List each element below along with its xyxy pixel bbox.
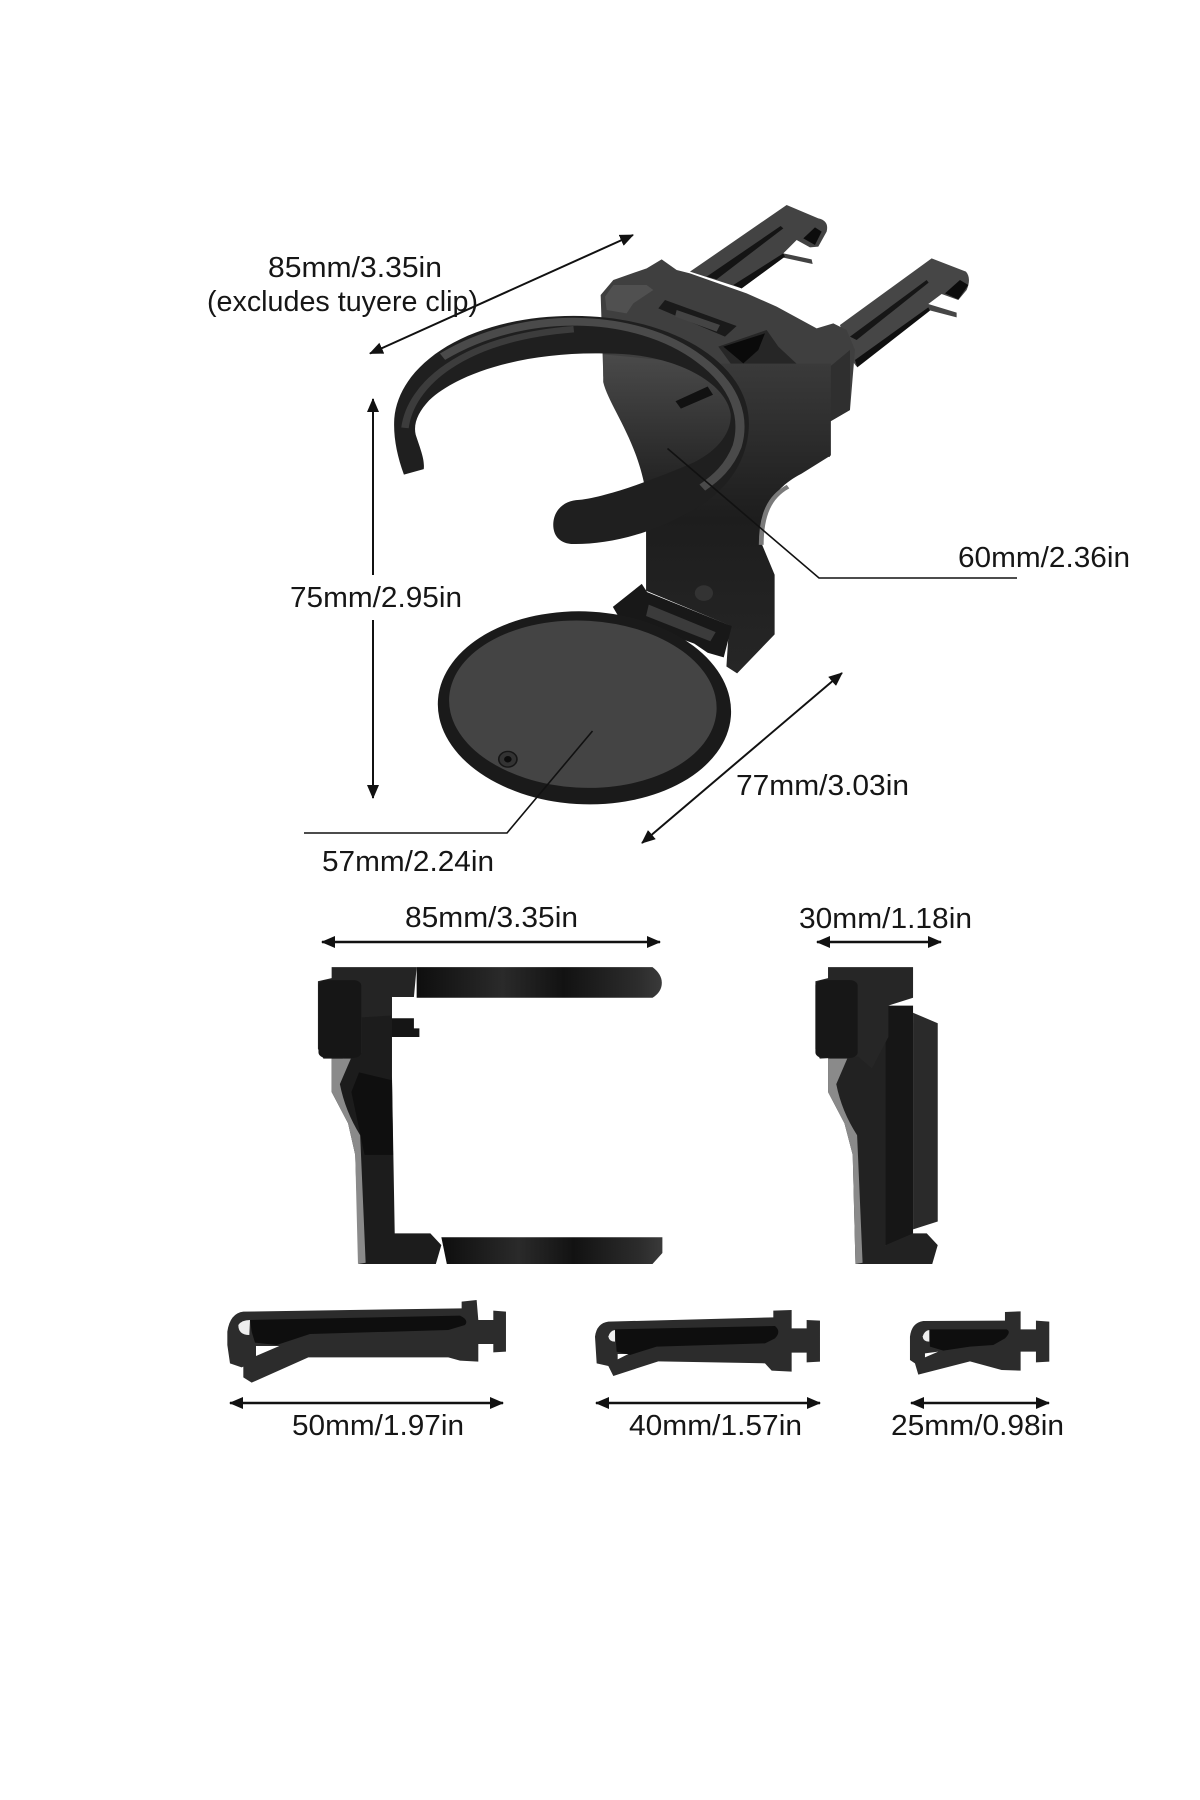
round tray bbox=[430, 603, 739, 813]
stem bbox=[828, 998, 938, 1264]
head block bbox=[318, 967, 417, 1059]
back plate bbox=[603, 354, 737, 488]
vent clip: long bbox=[227, 1300, 506, 1383]
dimension: side depth 30mm: 30mm/1.18in bbox=[799, 903, 972, 935]
top ring bar bbox=[417, 967, 662, 998]
stem highlight bbox=[828, 1059, 863, 1264]
dimension: tray inner 57mm bbox=[304, 731, 592, 878]
dimension: 25mm clip: 25mm/0.98in bbox=[891, 1410, 1064, 1442]
dimension: inner ring 60mm: 60mm/2.36in bbox=[958, 542, 1130, 574]
dimension: height 75mm: 75mm/2.95in bbox=[290, 582, 462, 614]
clip head bbox=[601, 259, 855, 457]
dimension: tray inner 57mm: 57mm/2.24in bbox=[322, 846, 494, 878]
tray plate bbox=[883, 1006, 913, 1245]
dimension: 40mm clip: 40mm/1.57in bbox=[629, 1410, 802, 1442]
right clip arm bbox=[840, 258, 969, 367]
tray hinge bbox=[613, 584, 732, 657]
stem bbox=[646, 364, 831, 673]
stem bbox=[332, 998, 441, 1264]
head side face bbox=[815, 980, 858, 1058]
dimension: ring depth 85mm: (excludes tuyere clip) bbox=[207, 286, 478, 318]
dimension: tray width 77mm bbox=[642, 673, 909, 843]
plate pins bbox=[676, 387, 713, 409]
vent clip arms and head bbox=[601, 205, 969, 457]
vent clip: medium bbox=[595, 1310, 820, 1376]
head block bbox=[815, 967, 913, 1068]
dimension: ring depth 85mm: 85mm/3.35in bbox=[268, 252, 442, 284]
dimension: tray width 77mm: 77mm/3.03in bbox=[736, 770, 909, 802]
product: side view closed bbox=[815, 967, 938, 1264]
pin bbox=[386, 1018, 419, 1037]
dimension: 50mm clip: 50mm/1.97in bbox=[292, 1410, 464, 1442]
dimension: ring depth 85mm bbox=[207, 235, 633, 354]
cup ring bbox=[394, 316, 749, 544]
stem screw bbox=[695, 585, 713, 601]
dimension: inner ring 60mm bbox=[668, 448, 1130, 578]
stem highlight bbox=[332, 1059, 366, 1264]
head side face bbox=[318, 980, 361, 1058]
stem shade bbox=[351, 1072, 393, 1155]
product: side view open bbox=[318, 967, 662, 1264]
stem highlight bbox=[761, 487, 788, 545]
product: perspective view of cup holder bbox=[394, 205, 969, 813]
dimension: side width 85mm: 85mm/3.35in bbox=[405, 902, 578, 934]
left clip arm bbox=[690, 205, 827, 288]
stem, ring and tray bbox=[394, 316, 831, 813]
tray edge bbox=[913, 1013, 938, 1229]
bottom ring bar bbox=[441, 1237, 662, 1264]
vent clip: short bbox=[910, 1311, 1049, 1375]
